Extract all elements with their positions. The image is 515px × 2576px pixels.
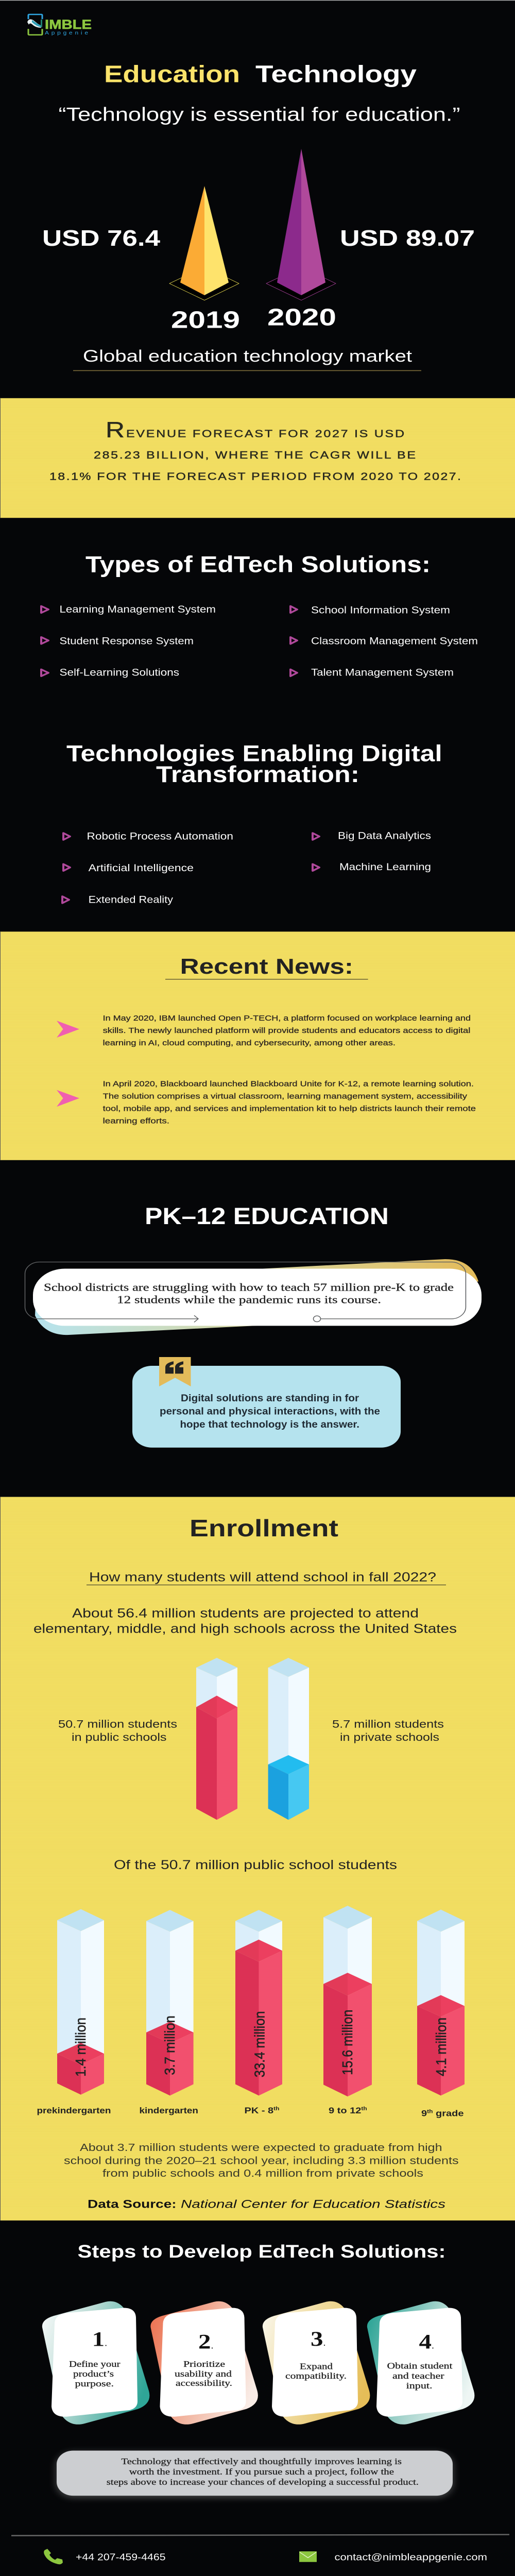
bar: 9th grade: 4.1 million — [434, 2018, 450, 2076]
item: Extended Reality — [89, 894, 173, 905]
card: step 2 — [150, 2301, 258, 2425]
intro text: elementary, middle, and high schools across the United States — [33, 1621, 457, 1636]
news item 1 — [103, 1014, 471, 1047]
forecast text: EVENUE FORECAST FOR 2027 IS USD — [126, 428, 404, 439]
intro text: About 56.4 million students are projected to attend — [72, 1606, 419, 1620]
conclusion text — [107, 2457, 419, 2487]
bar labels: th — [427, 2109, 433, 2114]
callout text — [44, 1281, 454, 1306]
card: step 4: and teacher — [392, 2371, 444, 2381]
bar labels: th — [361, 2106, 367, 2112]
graduation text: school during the 2020–21 school year, including 3.3 million students — [64, 2154, 459, 2166]
title — [104, 61, 417, 88]
item: Classroom Management System — [311, 636, 478, 647]
label: private schools: 5.7 million students — [332, 1718, 444, 1731]
logo: IMBLE — [45, 18, 92, 31]
icon: news arrow 2 — [57, 1090, 79, 1107]
icon: phone — [44, 2549, 63, 2564]
callout: school districts — [25, 1259, 482, 1335]
card: step 4 — [367, 2301, 474, 2425]
graduation text — [64, 2141, 459, 2179]
icon: news arrow 1 — [57, 1021, 79, 1038]
graduation text: from public schools and 0.4 million from private schools — [102, 2167, 423, 2179]
intro text — [33, 1606, 457, 1636]
pyramid 2020 — [266, 149, 336, 300]
item: Big Data Analytics — [338, 831, 431, 841]
item: Learning Management System — [60, 604, 216, 615]
panel: conclusion — [57, 2451, 453, 2496]
bar: kindergarten — [146, 1910, 194, 2095]
arrow icon — [290, 637, 297, 644]
forecast text: 285.23 BILLION, WHERE THE CAGR WILL BE — [94, 449, 416, 461]
bar: private schools — [268, 1658, 309, 1820]
news item 2 — [103, 1080, 476, 1125]
news item 2: The solution comprises a virtual classroom, learning management system, accessibility — [103, 1092, 468, 1100]
pyramid 2019 — [169, 186, 239, 300]
arrow icon — [63, 864, 70, 871]
bar: prekindergarten — [57, 1909, 104, 2095]
value 2020: USD 89.07 — [340, 226, 475, 251]
quote text: hope that technology is the answer. — [180, 1419, 359, 1430]
card: step 4: input. — [406, 2381, 433, 2391]
item: Student Response System — [60, 636, 194, 647]
bar: kindergarten: 3.7 million — [162, 2015, 178, 2075]
conclusion text: worth the investment. If you pursue such a project, follow the — [129, 2467, 394, 2476]
conclusion text: Technology that effectively and thoughtfully improves learning is — [121, 2457, 402, 2466]
bar labels: kindergarten — [139, 2106, 198, 2115]
heading: PK-12 education: PK–12 EDUCATION — [145, 1202, 389, 1229]
bar chart: public school students by grade — [37, 1906, 465, 2118]
arrow icon — [290, 606, 297, 613]
year 2020: 2020 — [267, 304, 336, 330]
quote: “Technology is essential for education.” — [58, 104, 460, 125]
callout: digital solutions — [132, 1357, 401, 1448]
graduation text: About 3.7 million students were expected to graduate from high — [80, 2141, 442, 2154]
item: School Information System — [311, 605, 450, 616]
bar: prekindergarten: 1.4 million — [73, 2018, 89, 2077]
forecast text: R — [106, 418, 125, 443]
contact: phone: +44 207-459-4465 — [76, 2552, 166, 2563]
arrow icon — [313, 864, 319, 871]
list: edtech solution types — [41, 604, 478, 678]
label: private schools: in private schools — [340, 1731, 439, 1743]
bar labels: grade — [433, 2108, 464, 2118]
heading: technologies enabling digital transformation: Transformation: — [156, 762, 359, 787]
heading: recent news: Recent News: — [180, 954, 353, 978]
forecast text: 18.1% FOR THE FORECAST PERIOD FROM 2020 TO 2027. — [49, 470, 461, 482]
bar: 9th grade — [417, 1909, 465, 2095]
item: Artificial Intelligence — [89, 863, 194, 874]
title: Technology — [255, 61, 417, 88]
quote text: Digital solutions are standing in for — [181, 1393, 359, 1403]
title: Education — [104, 61, 240, 88]
logo: Appgenie — [45, 30, 88, 36]
card: step 2: usability and — [175, 2369, 232, 2379]
bar: public schools — [196, 1658, 237, 1820]
card: step 1: Define your — [69, 2360, 121, 2369]
item: Talent Management System — [311, 667, 454, 678]
forecast text — [49, 418, 461, 482]
data source: National Center for Education Statistics — [181, 2198, 445, 2211]
label: private schools — [332, 1718, 444, 1743]
label: public schools: 50.7 million students — [58, 1718, 177, 1731]
heading: enrollment: Enrollment — [190, 1515, 338, 1541]
panel: revenue forecast — [0, 398, 515, 518]
logo — [27, 14, 92, 36]
callout text: 12 students while the pandemic runs its course. — [117, 1294, 381, 1306]
arrow icon — [41, 669, 48, 676]
heading: technologies enabling digital transformation — [66, 741, 442, 787]
arrow icon — [290, 669, 297, 676]
quote text — [160, 1393, 380, 1430]
arrow icon — [313, 833, 319, 840]
news item 2: tool, mobile app, and services and implementation kit to help districts launch their remote — [103, 1105, 476, 1113]
arrow icon — [63, 833, 70, 840]
chart caption: Global education technology market — [83, 347, 412, 365]
bar labels: th — [273, 2106, 280, 2112]
label: public schools — [58, 1718, 177, 1743]
conclusion text: steps above to increase your chances of developing a successful product. — [107, 2478, 419, 2487]
value 2019: USD 76.4 — [42, 226, 160, 251]
item: Machine Learning — [339, 862, 431, 873]
heading: steps to develop: Steps to Develop EdTech Solutions: — [77, 2242, 445, 2262]
bar labels: prekindergarten — [37, 2106, 111, 2115]
item: Robotic Process Automation — [87, 831, 233, 842]
news item 2: In April 2020, Blackboard launched Blackboard Unite for K-12, a remote learning solution. — [103, 1080, 474, 1088]
bar labels: 9 — [421, 2108, 427, 2118]
card: step 4: Obtain student — [387, 2361, 453, 2371]
label: public schools: in public schools — [72, 1731, 167, 1743]
heading: types of edtech solutions: Types of EdTech Solutions: — [85, 552, 431, 577]
data source — [88, 2198, 445, 2211]
card: step 1 — [42, 2301, 149, 2425]
news item 1: learning in AI, cloud computing, and cybersecurity, among other areas. — [103, 1039, 396, 1047]
card: step 3: compatibility. — [285, 2371, 347, 2381]
quote text: personal and physical interactions, with the — [160, 1406, 380, 1417]
contact: phone — [44, 2549, 166, 2564]
arrow icon — [41, 606, 48, 613]
arrow icon — [41, 637, 48, 644]
card: step 3 — [263, 2301, 370, 2425]
card: step 2: 2. — [198, 2330, 214, 2353]
bar: PK-8th: 33.4 million — [252, 2011, 268, 2077]
bar labels: 9 to 12 — [329, 2106, 361, 2115]
card: step 3: Expand — [300, 2362, 333, 2371]
card: step 2: accessibility. — [176, 2379, 232, 2388]
year 2019: 2019 — [171, 307, 240, 333]
card: step 3: 3. — [311, 2327, 326, 2350]
item: Self-Learning Solutions — [60, 667, 179, 678]
card: step 4: 4. — [419, 2330, 434, 2353]
callout text: School districts are struggling with how to teach 57 million pre-K to grade — [44, 1281, 454, 1293]
bar labels — [37, 2106, 464, 2118]
panel: recent news — [0, 931, 515, 1160]
data source: Data Source: — [88, 2198, 177, 2211]
question: How many students will attend school in fall 2022? — [89, 1570, 436, 1584]
card: step 2: Prioritize — [183, 2360, 225, 2369]
heading: technologies enabling digital transformation: Technologies Enabling Digital — [66, 741, 442, 766]
contact: email: contact@nimbleappgenie.com — [335, 2552, 487, 2563]
icon: envelope — [299, 2551, 317, 2562]
icon: quote ribbon — [159, 1357, 191, 1386]
card: step 1: 1. — [92, 2328, 107, 2351]
news item 1: In May 2020, IBM launched Open P-TECH, a platform focused on workplace learning and — [103, 1014, 471, 1023]
chart: market pyramids — [42, 149, 475, 333]
news item 2: learning efforts. — [103, 1117, 169, 1125]
panel: enrollment — [0, 1497, 515, 2221]
list: digital transformation technologies — [62, 831, 431, 905]
bar: 9 to 12th: 15.6 million — [340, 2010, 356, 2075]
arrow icon — [62, 896, 69, 903]
bar: PK-8th — [235, 1910, 282, 2095]
card: step 1: purpose. — [75, 2379, 114, 2389]
news item 1: skills. The newly launched platform will provide students and educators access to digital — [103, 1027, 470, 1035]
bar labels: PK - 8 — [244, 2106, 273, 2115]
bar: 9 to 12th — [323, 1906, 372, 2096]
subheading: Of the 50.7 million public school students — [114, 1858, 397, 1872]
card: step 1: product’s — [73, 2369, 114, 2379]
